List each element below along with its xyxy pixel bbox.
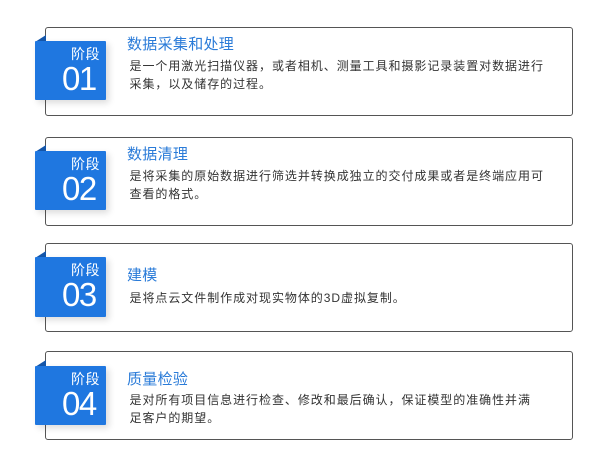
icon: stage 4 fold <box>35 360 46 367</box>
stage 1 text: 采集，以及储存的过程。 <box>130 77 272 91</box>
stage 3 label: 阶段 <box>71 262 100 278</box>
stage 1 badge <box>35 41 106 100</box>
stage 1 number: 01 <box>62 60 96 97</box>
stage 1 text: 是一个用激光扫描仪器，或者相机、测量工具和摄影记录装置对数据进行 <box>130 59 544 73</box>
panel: stage 1 <box>45 27 573 116</box>
stage 1 text <box>130 59 544 91</box>
panel: stage 2 <box>45 137 573 226</box>
stage 2 text: 是将采集的原始数据进行筛选并转换成独立的交付成果或者是终端应用可 <box>130 169 544 183</box>
stage 3 text: 是将点云文件制作成对现实物体的3D虚拟复制。 <box>130 291 406 305</box>
panel: stage 4 <box>45 351 573 440</box>
stage 4 text <box>130 393 531 425</box>
stage 4 text: 足客户的期望。 <box>130 411 220 425</box>
stage 4 text: 是对所有项目信息进行检查、修改和最后确认，保证模型的准确性并满 <box>130 393 531 407</box>
stage 4 label: 阶段 <box>71 371 100 387</box>
stage 4 badge <box>35 366 106 425</box>
stage 4 number: 04 <box>62 385 96 422</box>
stage 2 badge <box>35 151 106 210</box>
stage 3 heading: 建模 <box>127 267 158 284</box>
icon: stage 1 fold <box>35 35 46 42</box>
stage 3 number: 03 <box>62 276 96 313</box>
icon: stage 2 fold <box>35 145 46 152</box>
stage 2 heading: 数据清理 <box>127 146 188 163</box>
panel: stage 3 <box>45 243 573 332</box>
stage 1 heading: 数据采集和处理 <box>127 36 234 53</box>
icon: stage 3 fold <box>35 251 46 258</box>
stage 2 label: 阶段 <box>71 156 100 172</box>
stage 3 badge <box>35 257 106 317</box>
stage 4 heading: 质量检验 <box>127 371 188 388</box>
stage 2 text: 查看的格式。 <box>130 187 207 201</box>
stage 1 label: 阶段 <box>71 46 100 62</box>
stage 2 text <box>130 169 544 201</box>
stage 2 number: 02 <box>62 170 96 207</box>
